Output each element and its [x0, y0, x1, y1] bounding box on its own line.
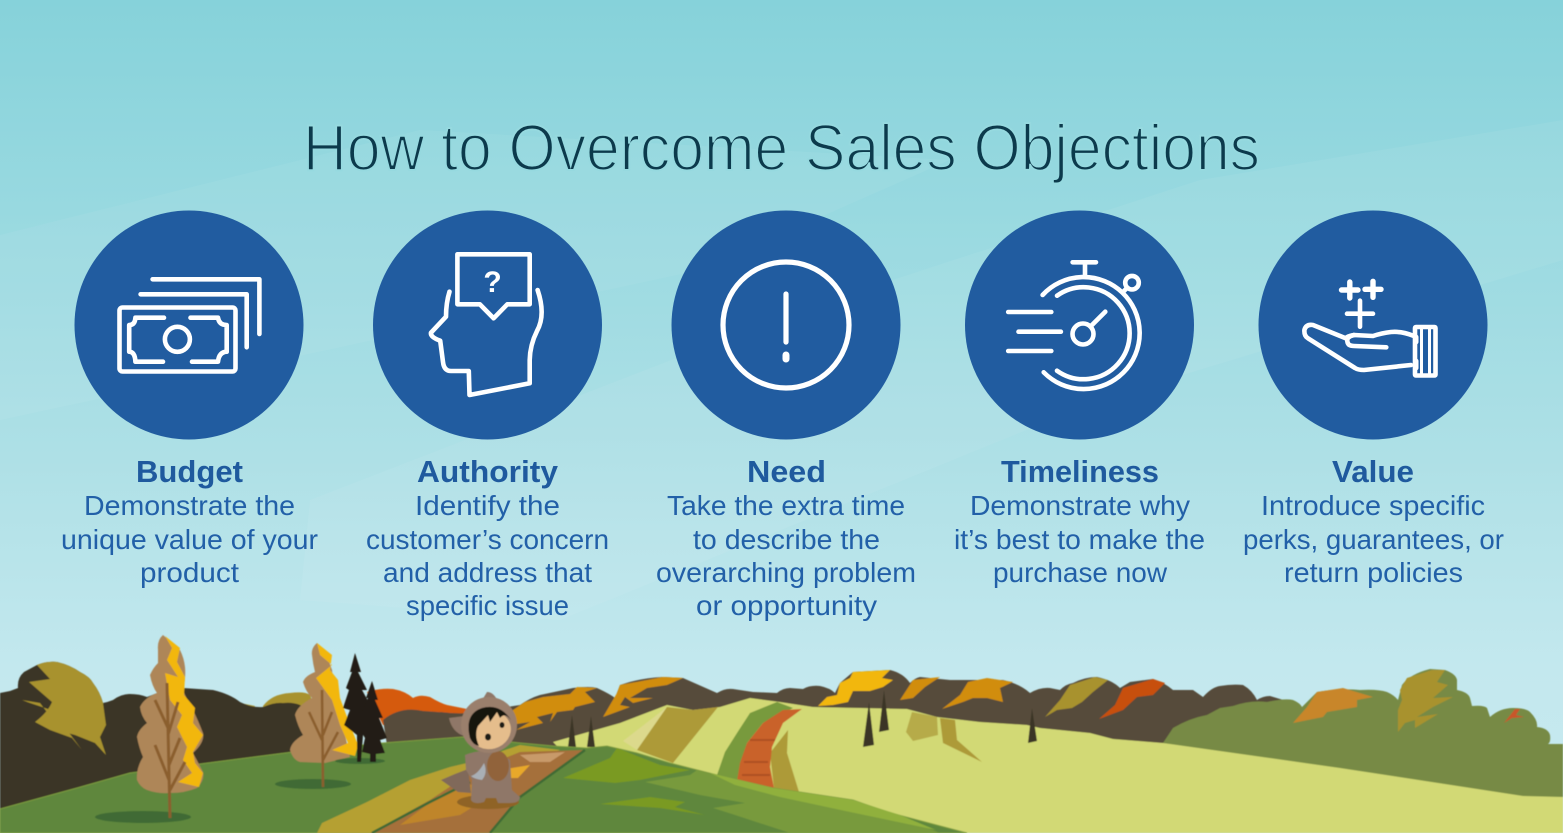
timeliness heading: Timeliness — [1001, 454, 1159, 489]
icon: head with question bubble — [431, 254, 542, 395]
authority circle — [373, 210, 602, 440]
icon: stopwatch — [1008, 262, 1140, 389]
hair — [468, 707, 511, 746]
budget heading: Budget — [136, 454, 243, 489]
budget description: unique value of your — [61, 524, 318, 555]
light meadow — [553, 698, 1563, 833]
panel: authority — [366, 210, 609, 621]
astro character in raccoon costume — [441, 692, 520, 809]
title: How to Overcome Sales Objections — [303, 111, 1260, 184]
hill light patches — [563, 748, 940, 833]
icon: head with question bubble: ? — [483, 266, 502, 299]
dirt path in the distance — [717, 702, 802, 788]
icon: hand with plus signs — [1304, 281, 1436, 376]
authority description — [366, 490, 609, 621]
eyes — [485, 734, 491, 740]
budget circle — [74, 210, 304, 440]
need description: to describe the — [693, 524, 880, 555]
meadow shadows — [623, 707, 982, 792]
value description: Introduce specific — [1261, 490, 1485, 521]
timeliness description: it’s best to make the — [954, 524, 1205, 555]
timeliness description — [954, 490, 1205, 588]
tree: left tall — [95, 635, 203, 823]
panel: timeliness — [954, 210, 1205, 588]
need description: Take the extra time — [667, 490, 905, 521]
value description: perks, guarantees, or — [1243, 524, 1504, 555]
authority description: Identify the — [415, 490, 560, 521]
timeliness circle — [965, 210, 1194, 440]
need description: or opportunity — [696, 590, 877, 621]
autumn tree crowns on ridge — [510, 670, 1165, 730]
ears — [449, 692, 498, 736]
tree: left small — [275, 643, 358, 789]
belly patch — [487, 751, 509, 781]
authority description: specific issue — [406, 590, 569, 621]
gray moon — [471, 763, 486, 780]
body — [465, 751, 520, 803]
distant left hills — [0, 662, 490, 815]
value description: return policies — [1284, 557, 1463, 588]
small conifers — [568, 690, 1037, 747]
budget description: Demonstrate the — [84, 490, 295, 521]
authority description: customer’s concern — [366, 524, 609, 555]
front green hill — [0, 737, 967, 833]
timeliness description: purchase now — [993, 557, 1167, 588]
landscape scenery — [0, 635, 1563, 833]
panel: need — [656, 210, 916, 621]
need description: overarching problem — [656, 557, 916, 588]
icon: exclamation mark — [723, 262, 849, 388]
shrub crowns — [1293, 670, 1524, 732]
value heading: Value — [1332, 454, 1414, 489]
budget description — [61, 490, 318, 588]
hood — [461, 697, 517, 753]
stone path in foreground — [317, 745, 585, 833]
budget description: product — [140, 557, 239, 588]
need heading: Need — [747, 454, 826, 489]
need description — [656, 490, 916, 621]
timeliness description: Demonstrate why — [970, 490, 1190, 521]
panel: value — [1243, 210, 1504, 588]
value description — [1243, 490, 1504, 588]
value circle — [1258, 210, 1488, 440]
tail — [441, 769, 471, 793]
face — [465, 706, 515, 754]
authority heading: Authority — [417, 454, 559, 489]
panel: budget — [61, 210, 318, 588]
green shrubs right — [1163, 669, 1563, 800]
pine trees — [335, 653, 387, 764]
brown ridge — [440, 670, 1290, 760]
icon: money stack — [120, 279, 259, 372]
character shadow — [457, 795, 519, 809]
need circle — [672, 210, 900, 440]
authority description: and address that — [383, 557, 592, 588]
